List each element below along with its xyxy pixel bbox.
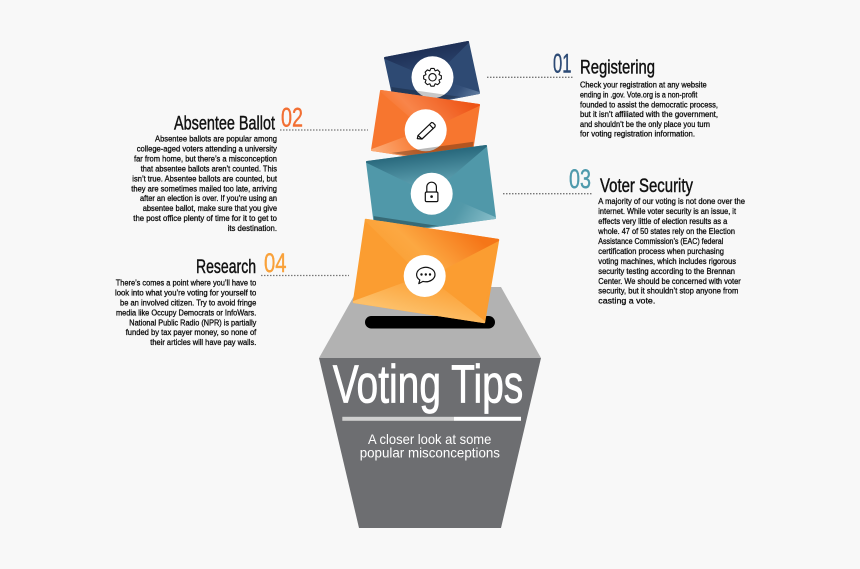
text block: Absentee Ballot: after an election is over. If you’re using an	[140, 193, 277, 203]
subtitle: A closer look at some	[368, 431, 491, 447]
text block: Research: media like Occupy Democrats or InfoWars.	[116, 307, 256, 317]
icon: gear	[412, 56, 454, 98]
section 02: Absentee Ballot	[131, 103, 368, 233]
text block: Absentee Ballot: absentee ballot, make sure that you give	[143, 203, 277, 213]
text block: Registering: founded to assist the democratic process,	[580, 99, 718, 109]
text block: Voter Security	[597, 196, 745, 306]
number 01: 01	[553, 49, 572, 79]
envelope 2: orange with pencil	[371, 90, 480, 156]
text block: Voter Security: internet. While voter security is an issue, it	[598, 206, 737, 216]
text block: Voter Security: casting a vote.	[598, 296, 655, 306]
number 02: 02	[281, 103, 303, 133]
text block: Research: be an involved citizen. Try to avoid fringe	[120, 298, 257, 308]
text block: Research: funded by tax payer money, so none of	[126, 327, 257, 337]
heading: Voter Security: Voter Security	[600, 175, 693, 197]
ballot box	[319, 287, 541, 528]
title underline	[342, 417, 521, 421]
ballot slot	[365, 316, 495, 328]
heading: Research: Research	[196, 256, 256, 278]
subtitle	[360, 431, 500, 461]
text block: Absentee Ballot: college-aged voters attending a university	[137, 144, 278, 154]
text block: Absentee Ballot	[131, 134, 278, 233]
text block: Voter Security: whole. 47 of 50 states rely on the Election	[597, 226, 735, 236]
title: Voting Tips	[333, 356, 523, 415]
icon: speech bubble	[404, 255, 446, 297]
text block: Research: look into what you’re voting for yourself to	[115, 288, 257, 298]
text block: Registering: Check your registration at any website	[580, 80, 707, 90]
envelope 3: teal with lock	[366, 145, 496, 228]
text block: Research	[115, 278, 257, 347]
heading: Absentee Ballot: Absentee Ballot	[174, 112, 275, 134]
text block: Registering: but it isn’t affiliated with the government,	[580, 109, 718, 119]
text block: Absentee Ballot: that absentee ballots aren’t counted. This	[141, 164, 277, 174]
connector: dotted line 04	[261, 274, 349, 276]
text block: Voter Security: voting machines, which includes rigorous	[598, 256, 736, 266]
text block: Absentee Ballot: Absentee ballots are popular among	[155, 134, 277, 144]
text block: Absentee Ballot: they are sometimes mailed too late, arriving	[131, 183, 277, 193]
text block: Registering: for voting registration information.	[580, 129, 695, 139]
text block: Registering: and shouldn’t be the only place you turn	[580, 119, 710, 129]
text block: Absentee Ballot: its destination.	[228, 223, 277, 233]
text block: Voter Security: security testing according to the Brennan	[598, 266, 735, 276]
text block: Voter Security: certification process when purchasing	[598, 246, 724, 256]
text block: Research: There’s comes a point where you’ll have to	[116, 278, 257, 288]
connector: dotted line 03	[503, 193, 592, 195]
icon: pencil	[405, 109, 447, 151]
connector: dotted line 01	[487, 76, 574, 78]
box front	[319, 358, 541, 528]
section 01: Registering	[487, 49, 718, 139]
text block: Registering: ending in .gov. Vote.org is a non-profit	[580, 90, 698, 100]
text block: Voter Security: A majority of our voting is not done over the	[598, 196, 745, 206]
text block: Voter Security: Center. We should be concerned with voter	[598, 276, 741, 286]
text block: Absentee Ballot: the post office plenty of time for it to get to	[133, 213, 277, 223]
envelope 4: amber with speech bubble	[354, 220, 498, 322]
text block: Absentee Ballot: far from home, but there’s a misconception	[134, 154, 277, 164]
number 03: 03	[569, 164, 591, 194]
text block: Research: their articles will have pay walls.	[150, 337, 256, 347]
heading: Registering: Registering	[580, 56, 655, 78]
text block: Registering	[580, 80, 718, 139]
section 04: Research	[115, 248, 349, 347]
icon: padlock	[411, 173, 453, 215]
text block: Voter Security: Assistance Commission’s (EAC) federal	[598, 236, 723, 246]
box lid	[319, 287, 541, 358]
envelope 1: navy with gear	[384, 41, 480, 100]
number 04: 04	[264, 248, 286, 278]
section 03: Voter Security	[503, 164, 745, 306]
text block: Research: National Public Radio (NPR) is partially	[129, 317, 257, 327]
text block: Voter Security: security, but it shouldn’t stop anyone from	[598, 286, 738, 296]
subtitle: popular misconceptions	[360, 445, 500, 461]
connector: dotted line 02	[280, 129, 368, 131]
text block: Absentee Ballot: isn’t true. Absentee ballots are counted, but	[132, 173, 278, 183]
text block: Voter Security: effects very little of election results as a	[598, 216, 728, 226]
